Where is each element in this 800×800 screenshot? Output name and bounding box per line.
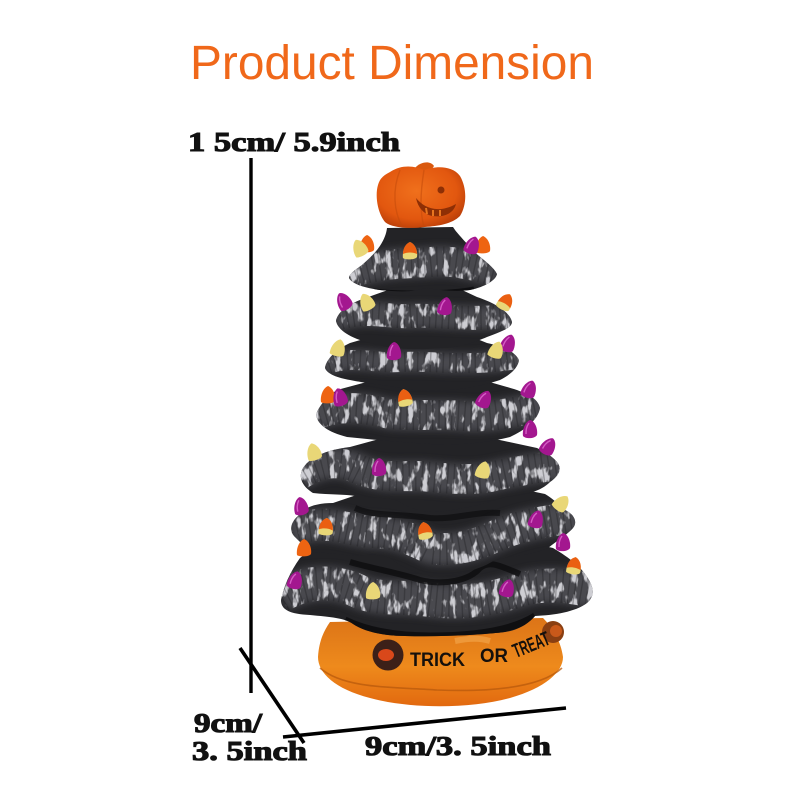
tree tier 3: [325, 340, 519, 382]
tree tier 1: [348, 227, 498, 293]
width dimension line: [283, 708, 566, 737]
tree tier 4: [316, 382, 540, 440]
product: halloween ceramic tree: [280, 162, 600, 706]
tree base: [318, 618, 564, 706]
title: Product Dimension: [190, 37, 594, 90]
depth dimension line: [240, 648, 304, 743]
pumpkin topper: [377, 162, 465, 228]
tree lights: [286, 234, 583, 599]
tree tier 2: [336, 288, 512, 349]
base lettering: TREAT: [510, 628, 553, 663]
height dimension line: [249, 158, 253, 693]
tree tier 5: [300, 440, 560, 497]
depth dimension label: [192, 708, 307, 766]
base lettering: OR: [480, 646, 508, 667]
base medallions: [372, 621, 564, 670]
depth dimension label: 3. 5inch: [192, 736, 307, 766]
depth dimension label: 9cm/: [194, 708, 263, 738]
tree tier 7: [281, 547, 593, 636]
tree tier 6: [291, 492, 576, 570]
base lettering: TRICK: [410, 650, 465, 671]
height dimension label: 1 5cm/ 5.9inch: [188, 127, 400, 157]
base lettering: [410, 628, 553, 671]
width dimension label: 9cm/3. 5inch: [365, 731, 551, 761]
